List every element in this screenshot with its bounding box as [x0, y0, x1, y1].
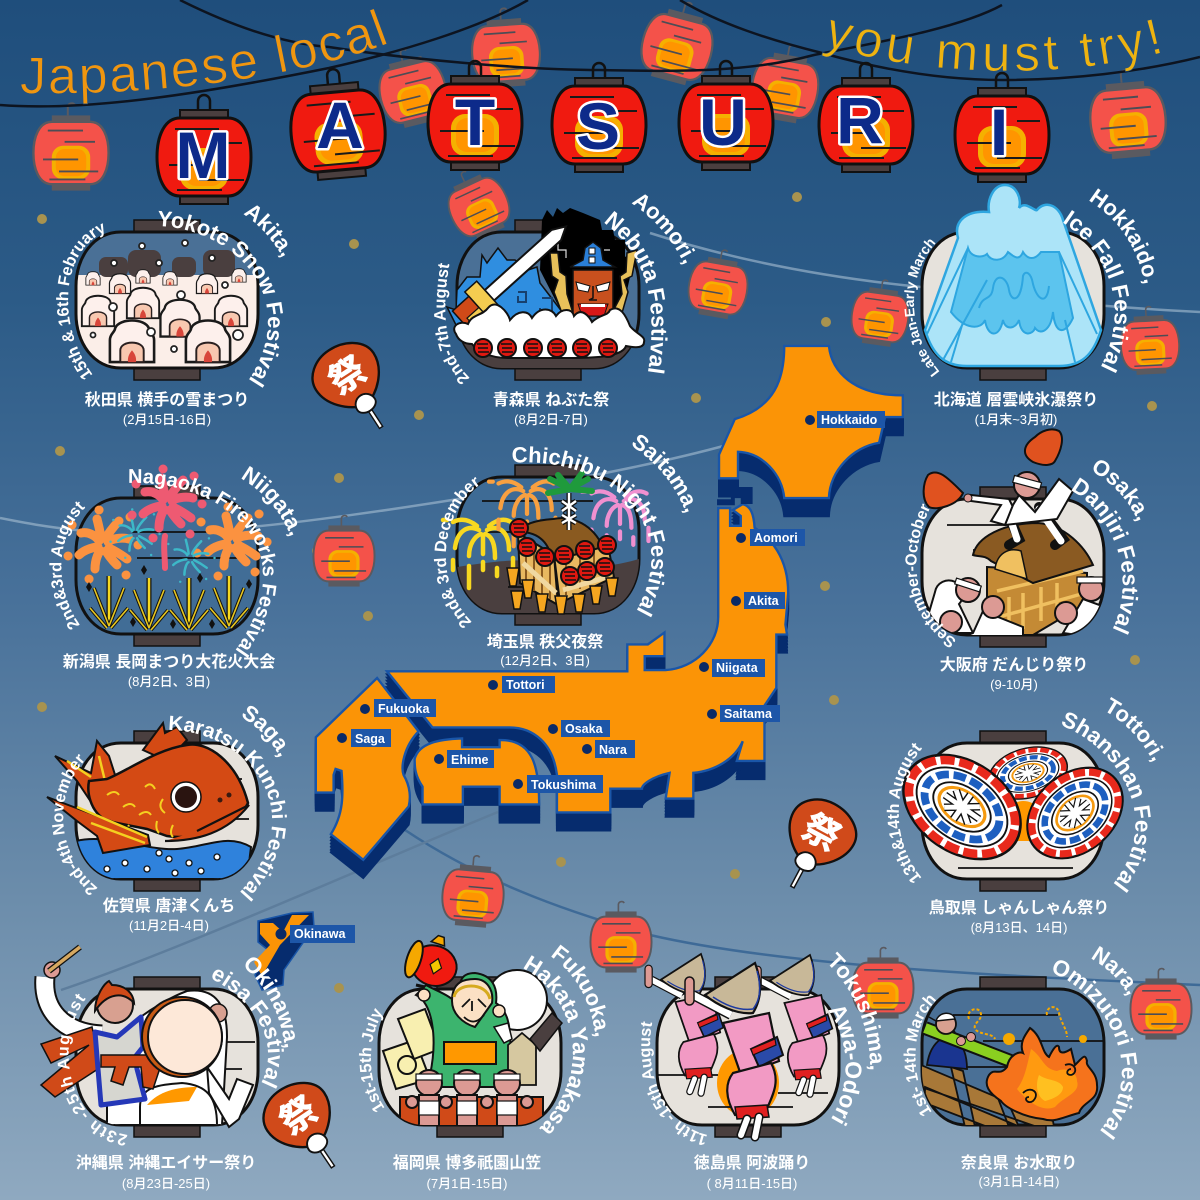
heading: Ice Fall Festival: Ice Fall Festival [1063, 210, 1130, 373]
map labels: Okinawa [294, 927, 346, 941]
lantern illustration: nebuta warrior [447, 208, 644, 380]
map labels: Saitama [724, 707, 773, 721]
uchiwa fan 2 [762, 789, 866, 903]
lantern illustration: red sea bream [47, 723, 258, 891]
panel: Niigata Nagaoka Fireworks Festival [49, 464, 298, 689]
lantern I [955, 73, 1049, 182]
lantern A: A [316, 88, 364, 162]
caption: Japanese name: 鳥取県 しゃんしゃん祭り [929, 898, 1109, 917]
date: September-October: September-October [905, 504, 956, 648]
heading: Tottori: Tottori, [1108, 697, 1164, 762]
lantern illustration: eisa drummer [41, 947, 258, 1137]
caption: date: (1月末~3月初) [975, 412, 1057, 427]
heading: Osaka: Osaka, [1094, 460, 1144, 522]
heading: Danjiri Festival: Danjiri Festival [1072, 478, 1138, 635]
lantern A [286, 65, 389, 182]
title: Japanese local: Japanese local [21, 9, 387, 104]
heading: Awa-Odori: Awa-Odori [828, 1007, 862, 1126]
caption: date: (8月13日、14日) [971, 920, 1067, 935]
map of Japan [254, 346, 903, 990]
map labels: Tokushima [531, 778, 597, 792]
lantern U: U [699, 85, 747, 159]
lantern illustration: fireworks over rice [68, 469, 267, 646]
caption: date: (3月1日-14日) [979, 1174, 1059, 1189]
heading: Hokkaido: Hokkaido, [1089, 188, 1154, 284]
caption: Japanese name: 佐賀県 唐津くんち [103, 896, 235, 915]
caption: date: (8月2日-7日) [514, 412, 588, 427]
map labels: Aomori [754, 531, 798, 545]
map labels: Hokkaido [821, 413, 878, 427]
uchiwa fan 2: 祭 [794, 799, 851, 862]
region: Okinawa island [254, 912, 314, 990]
uchiwa fan 1 [302, 331, 410, 446]
heading: Chichibu Night Festival: Chichibu Night Festival [512, 446, 666, 618]
lantern illustration: frozen waterfall [922, 185, 1104, 380]
lantern R: R [836, 83, 884, 157]
heading: Nara: Nara, [1092, 946, 1133, 996]
caption: date: (12月2日、3日) [500, 653, 590, 668]
lantern M: M [176, 118, 230, 192]
MATSURI lantern row [157, 61, 1049, 204]
lantern M [157, 95, 251, 204]
panel: Saitama Chichibu Night Festival [434, 434, 693, 668]
heading: Aomori: Aomori, [632, 194, 696, 264]
lantern illustration: festival float and fireworks [443, 465, 648, 625]
heading: eisa Festival: eisa Festival [212, 970, 284, 1089]
map labels: Tottori [506, 678, 545, 692]
date: 1st- 14th March: 1st- 14th March [904, 996, 936, 1116]
caption: Japanese name: 北海道 層雲峡氷瀑祭り [934, 390, 1098, 409]
lantern R [819, 63, 913, 172]
date: Late Jan-Early March: Late Jan-Early March [904, 240, 940, 378]
panel: Hokkaido Ice Fall Festival [904, 184, 1154, 427]
lantern S [552, 63, 646, 172]
caption: Japanese name: 徳島県 阿波踊り [694, 1153, 810, 1172]
map labels [276, 411, 885, 943]
lantern illustration: danjiri float and dancer [922, 429, 1105, 647]
caption: Japanese name: 福岡県 博多祇園山笠 [393, 1153, 541, 1172]
lantern illustration: awa dancers [645, 954, 839, 1137]
caption: date: ( 8月11日-15日) [707, 1176, 797, 1191]
lantern illustration: shanshan umbrellas [884, 731, 1141, 891]
panel: Saga Karatsu Kunchi Festival [46, 706, 287, 933]
heading: Niigata: Niigata, [242, 466, 298, 536]
map labels: Osaka [565, 722, 604, 736]
heading: Yokote Snow Festival: Yokote Snow Festival [158, 210, 283, 388]
faded background strings [0, 233, 1200, 990]
heading: Tokushima: Tokushima, [830, 952, 882, 1070]
date: 1st-15th July: 1st-15th July [358, 1008, 384, 1112]
lantern T [428, 61, 522, 170]
lantern illustration: fire ceremony [921, 977, 1104, 1137]
panel: Tottori Shanshan Festival [886, 697, 1164, 935]
lantern T: T [455, 85, 495, 159]
title: you must try!: you must try! [822, 19, 1160, 72]
map labels: Saga [355, 732, 386, 746]
gold light dots [37, 192, 1157, 993]
date: 2nd-7th August: 2nd-7th August [434, 263, 470, 384]
panel: Akita Yokote Snow Festival [56, 205, 288, 427]
lantern S: S [576, 89, 620, 163]
caption: Japanese name: 沖縄県 沖縄エイサー祭り [76, 1154, 256, 1172]
heading: Saitama: Saitama, [632, 434, 693, 513]
caption: date: (11月2日-4日) [129, 918, 209, 933]
caption: date: (9-10月) [990, 677, 1038, 692]
caption: date: (7月1日-15日) [427, 1176, 507, 1191]
caption: Japanese name: 新潟県 長岡まつり大花火大会 [63, 652, 275, 671]
lantern illustration: snow huts [76, 220, 258, 380]
caption: Japanese name: 大阪府 だんじり祭り [940, 656, 1088, 674]
heading: Omizutori Festival: Omizutori Festival [1053, 960, 1138, 1140]
caption: Japanese name: 青森県 ねぶた祭 [493, 391, 609, 409]
map labels: Ehime [451, 753, 489, 767]
heading: Hakata Yamakasa: Hakata Yamakasa [524, 955, 588, 1134]
heading: Karatsu Kunchi Festival: Karatsu Kunchi Festival [169, 716, 287, 902]
date: 15th &amp; 16th February: 15th & 16th February [56, 223, 104, 380]
date: 2nd-4th November: 2nd-4th November [52, 754, 98, 895]
caption: Japanese name: 秋田県 横手の雪まつり [85, 390, 249, 409]
uchiwa fan 1: 祭 [317, 342, 375, 405]
map labels: Akita [748, 594, 780, 608]
panel: Fukuoka Hakata Yamakasa [358, 934, 606, 1191]
uchiwa fan 3 [253, 1071, 361, 1186]
panel: Okinawa eisa Festival [34, 944, 295, 1191]
lantern I: I [990, 95, 1008, 169]
lantern U [679, 61, 773, 170]
heading: Okinawa: Okinawa, [246, 957, 295, 1048]
heading: Akita: Akita, [244, 205, 288, 258]
lantern illustration: yamakasa float [379, 928, 562, 1137]
map labels: Fukuoka [378, 702, 430, 716]
caption: date: (2月15日-16日) [123, 412, 211, 427]
date: 13th&amp;14th August: 13th&14th August [886, 743, 922, 883]
heading: Shanshan Festival: Shanshan Festival [1062, 712, 1151, 893]
caption: Japanese name: 埼玉県 秩父夜祭 [487, 633, 603, 651]
panel: Osaka Danjiri Festival [905, 428, 1144, 692]
panel: Aomori Nebuta Festival [434, 194, 696, 427]
panel: Nara Omizutori Festival [904, 946, 1138, 1189]
map labels: Nara [599, 743, 628, 757]
heading: Fukuoka: Fukuoka, [551, 944, 606, 1036]
caption: date: (8月23日-25日) [122, 1176, 210, 1191]
date: 2nd&amp;3rd August: 2nd&3rd August [49, 501, 86, 630]
map labels: Niigata [716, 661, 759, 675]
caption: Japanese name: 奈良県 お水取り [961, 1153, 1077, 1172]
caption: date: (8月2日、3日) [128, 674, 210, 689]
date: 11th -15th August: 11th -15th August [641, 1021, 707, 1145]
heading: Saga: Saga, [242, 706, 286, 758]
date: 2nd&amp; 3rd December: 2nd& 3rd December [434, 477, 478, 628]
heading: Nagaoka Fireworks Festival: Nagaoka Fireworks Festival [129, 469, 276, 658]
black lantern strings [0, 0, 1200, 106]
heading: Nebuta Festival: Nebuta Festival [604, 211, 668, 374]
panel: Tokushima Awa-Odori [641, 952, 882, 1191]
uchiwa fan 3: 祭 [267, 1082, 326, 1145]
date: 23th -25th Aug- ust: 23th -25th Aug- ust [58, 994, 128, 1146]
